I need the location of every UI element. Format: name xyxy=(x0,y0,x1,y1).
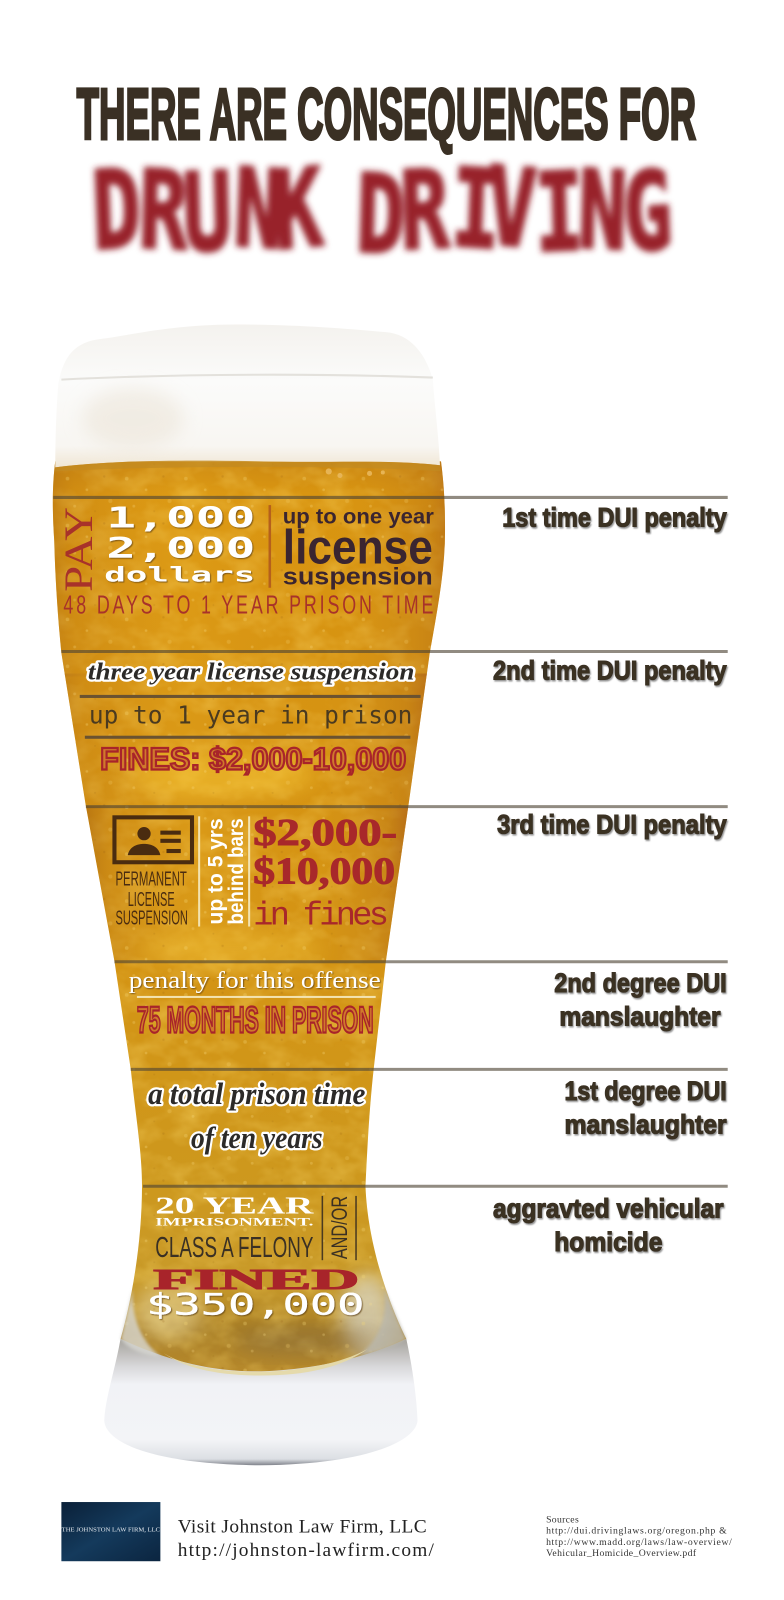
liquid bottom xyxy=(163,1349,368,1376)
fines: $2,000- xyxy=(253,812,397,854)
label: 2nd degree DUI manslaughter: 2nd degree DUI xyxy=(554,968,727,998)
beer body xyxy=(41,457,459,1380)
penalty divider lines xyxy=(53,497,728,1186)
footer: sources: Vehicular_Homicide_Overview.pdf xyxy=(546,1548,697,1559)
heading: drunk driving: DRUNK DRIVING xyxy=(90,142,674,279)
footer: sources: Sources xyxy=(546,1514,579,1525)
footer: sources: http://dui.drivinglaws.org/oregon.php & xyxy=(546,1526,727,1537)
label: 1st time DUI penalty: 1st time DUI penalty xyxy=(502,503,727,533)
permanent license suspension: SUSPENSION xyxy=(115,907,188,929)
permanent license suspension: PERMANENT xyxy=(115,869,187,891)
logo: Johnston Law Firm xyxy=(61,1502,161,1561)
label: 1st degree DUI manslaughter: 1st degree DUI xyxy=(564,1076,727,1106)
20 year imprisonment: IMPRISONMENT. xyxy=(155,1217,314,1229)
logo: Johnston Law Firm: THE JOHNSTON LAW FIRM, LLC xyxy=(62,1527,161,1534)
license suspension script: three year license suspension xyxy=(88,659,414,686)
panel: 1st degree DUI manslaughter penalty xyxy=(148,1077,365,1155)
license suspension xyxy=(283,504,434,591)
fine amount: $350,000 xyxy=(146,1287,364,1321)
PAY: PAY xyxy=(57,507,101,592)
prison time rotated: up to 5 yrs xyxy=(204,818,228,924)
fine amounts: dollars xyxy=(104,563,255,587)
label: aggravated vehicular homicide: aggravted vehicular xyxy=(493,1193,724,1223)
label: aggravated vehicular homicide xyxy=(493,1193,724,1257)
license suspension: up to one year xyxy=(283,504,434,528)
beer glass xyxy=(41,324,459,1465)
permanent license suspension: LICENSE xyxy=(128,889,175,911)
fine amounts xyxy=(104,501,255,587)
prison time: 48 DAYS TO 1 YEAR PRISON TIME xyxy=(63,590,433,619)
foam xyxy=(55,324,440,467)
fine amounts: 2,000 xyxy=(106,531,255,565)
fines: $10,000 xyxy=(253,851,395,893)
glass base xyxy=(104,1339,418,1465)
label: 1st degree DUI manslaughter: manslaughter xyxy=(564,1110,727,1140)
prison time rotated: behind bars xyxy=(224,818,248,924)
footer: sources: http://www.madd.org/laws/law-overview/ xyxy=(546,1537,732,1548)
fine amounts: 1,000 xyxy=(106,501,255,535)
fines xyxy=(253,812,397,935)
label: 2nd time DUI penalty: 2nd time DUI penalty xyxy=(493,656,727,686)
panel: 3rd time DUI penalties xyxy=(114,812,397,935)
prison time: up to 1 year in prison xyxy=(89,700,412,729)
license suspension: suspension xyxy=(283,564,433,591)
label: aggravated vehicular homicide: homicide xyxy=(554,1227,662,1257)
glass sides near base xyxy=(121,1288,161,1357)
fines: FINES: $2,000-10,000 xyxy=(100,740,406,776)
script line one: a total prison time xyxy=(148,1077,365,1111)
20 year imprisonment: 20 YEAR xyxy=(155,1192,314,1219)
footer: sources xyxy=(546,1514,732,1559)
prison time rotated xyxy=(204,818,248,924)
footer: visit text: http://johnston-lawfirm.com/ xyxy=(178,1540,434,1561)
panel: 2nd time DUI penalties xyxy=(80,659,421,776)
footer: visit text xyxy=(178,1517,434,1561)
label: 1st degree DUI manslaughter xyxy=(564,1076,727,1140)
panel: aggravated vehicular homicide penalty xyxy=(146,1192,364,1321)
license suspension: license xyxy=(283,521,433,574)
class a felony: CLASS A FELONY xyxy=(155,1232,313,1264)
panel: 1st time DUI penalties xyxy=(57,501,434,619)
20 year imprisonment xyxy=(155,1192,314,1229)
icon: license card xyxy=(114,817,192,862)
and/or: AND/OR xyxy=(327,1196,352,1259)
panel: 2nd degree DUI manslaughter penalty xyxy=(129,967,381,1041)
fines: in fines xyxy=(253,897,389,935)
footer: visit text: Visit Johnston Law Firm, LLC xyxy=(178,1517,427,1538)
label: 3rd time DUI penalty: 3rd time DUI penalty xyxy=(497,810,727,840)
script line two: of ten years xyxy=(191,1121,323,1155)
offense line: penalty for this offense xyxy=(129,967,381,994)
permanent license suspension xyxy=(115,869,188,929)
droplets near foam xyxy=(326,468,385,478)
label: 2nd degree DUI manslaughter: manslaughter xyxy=(559,1002,721,1032)
fined: FINED xyxy=(153,1265,359,1296)
label: 2nd degree DUI manslaughter xyxy=(554,968,727,1032)
months in prison: 75 MONTHS IN PRISON xyxy=(137,1000,374,1041)
